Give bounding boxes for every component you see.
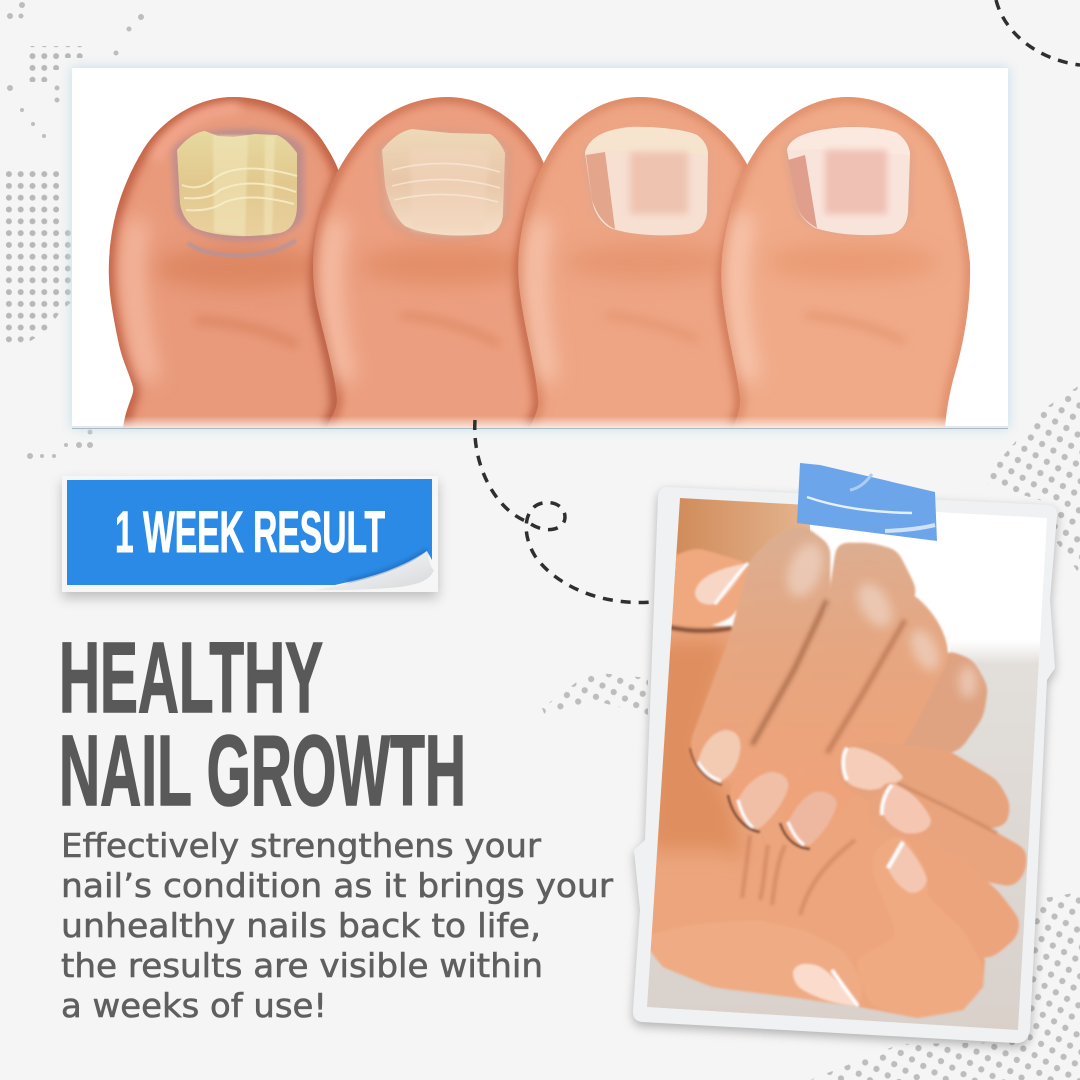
dashed arc top right	[996, 0, 1080, 65]
damaged nail	[177, 131, 297, 236]
pinky side knuckle	[902, 651, 988, 754]
body text: a weeks of use!	[61, 986, 327, 1025]
knuckle highlights	[780, 538, 977, 698]
blue tape	[797, 463, 937, 541]
palm and thumb	[640, 622, 985, 1018]
middle finger	[728, 543, 917, 832]
improving nail	[382, 129, 505, 235]
body text: Effectively strengthens your	[61, 826, 541, 865]
nail fold	[174, 131, 302, 239]
nearly clear nail	[585, 127, 708, 235]
lower finger three	[926, 850, 1020, 959]
body text: the results are visible within	[61, 946, 543, 985]
healthy nail	[787, 127, 910, 235]
hands	[640, 525, 1027, 1018]
toe 4 healthy nail	[721, 97, 970, 428]
body text: unhealthy nails back to life,	[61, 906, 541, 945]
lower finger one	[837, 743, 1010, 830]
lower finger two	[867, 781, 1027, 887]
dashed connector with loop	[475, 420, 652, 602]
heading: HEALTHY	[59, 622, 323, 734]
banner label: 1 WEEK RESULT	[115, 500, 385, 565]
toe 1 with damaged nail	[109, 97, 345, 428]
lower finger four	[884, 840, 942, 1016]
panel: toe nail progression	[72, 68, 1008, 429]
photo backdrop	[672, 495, 810, 590]
third finger	[780, 590, 948, 849]
shadow cast by toe 3	[520, 170, 546, 428]
icon: page curl	[315, 551, 434, 590]
thumb	[651, 937, 860, 1008]
shadow cast by toe 2	[316, 175, 340, 428]
heading: NAIL GROWTH	[59, 715, 466, 827]
shadow cast by toe 4	[723, 170, 750, 428]
heading	[59, 622, 466, 827]
panel: hand photo frame	[633, 463, 1060, 1043]
banner: 1 week result	[62, 476, 438, 592]
index finger	[690, 525, 830, 785]
palm wrinkles	[742, 835, 855, 915]
body text: nail’s condition as it brings your	[61, 866, 613, 905]
toe 3 nearly clear nail	[518, 97, 752, 428]
toe 2 improving nail	[313, 97, 550, 428]
body text	[61, 826, 613, 1025]
top-left finger	[665, 548, 752, 631]
